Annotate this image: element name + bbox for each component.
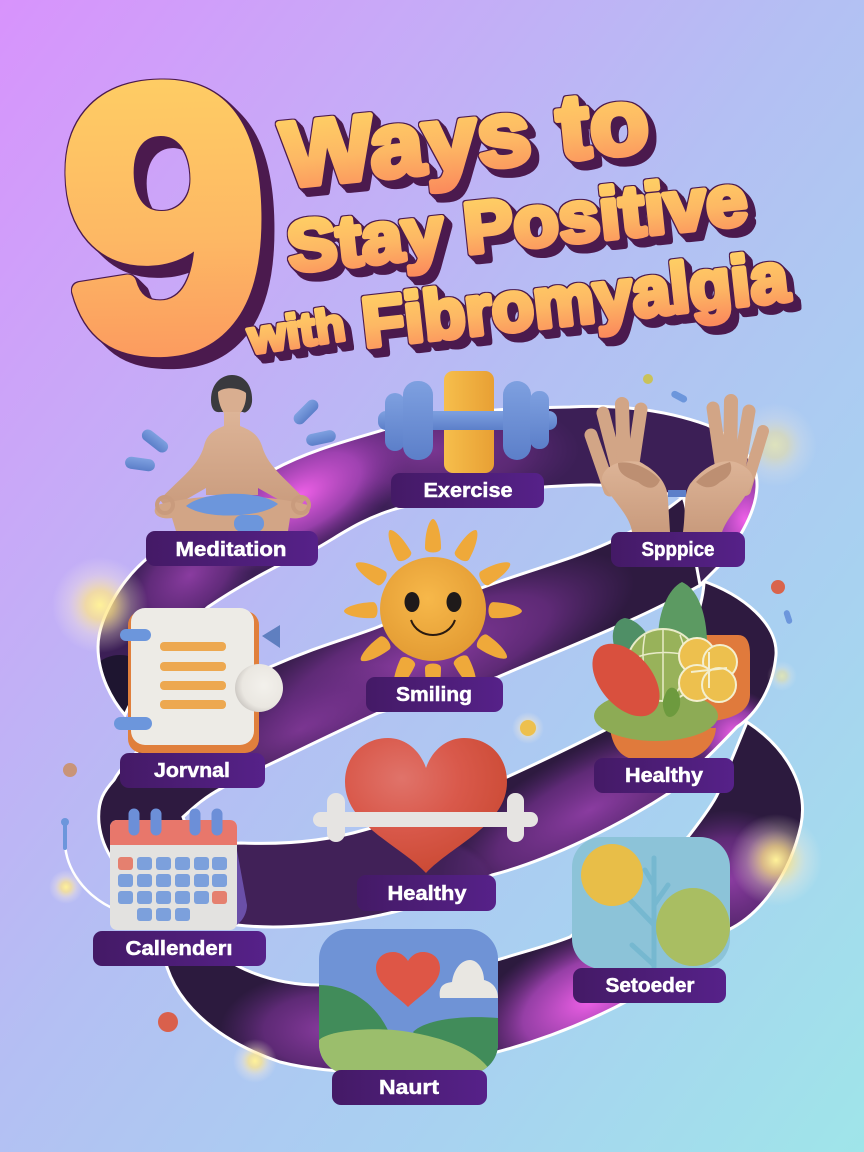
light glows: [49, 403, 822, 1083]
label: Callenderı: Callenderı: [126, 938, 232, 960]
spiral ribbon path: [65, 386, 810, 1118]
label: Naurt: Naurt: [379, 1077, 439, 1099]
label: Smiling: [366, 677, 503, 712]
label: Meditation: [146, 531, 318, 566]
icon: healthy food bowl: [579, 582, 750, 760]
label: Exercise: [391, 473, 544, 508]
label: Setoeder: [573, 968, 726, 1003]
label: Exercise: Exercise: [424, 480, 512, 502]
label: Callenderı: [93, 931, 266, 966]
label: Healthy (food): [594, 758, 734, 793]
title: Ways to: Ways to: [277, 69, 653, 207]
label: Healthy (heart): Healthy: [388, 883, 467, 905]
icon: meditating person: [124, 375, 337, 532]
title: Stay Positive: Stay Positive: [283, 160, 751, 288]
label: Setoeder: Setoeder: [606, 975, 695, 997]
icon: calendar: [110, 814, 247, 930]
title: big number 9: 9: [58, 10, 270, 425]
icon: dumbbell: [378, 371, 557, 473]
decorative beads and dashes: [61, 374, 793, 1032]
label: Spppice: [611, 532, 745, 567]
label: Spppice: Spppice: [642, 539, 714, 561]
label: Healthy (food): Healthy: [625, 765, 704, 787]
label: Naurt: [332, 1070, 487, 1105]
label: Meditation: Meditation: [176, 539, 286, 561]
ribbon: top band: [96, 404, 758, 717]
icon: smiling sun: [344, 519, 522, 697]
label: Smiling: Smiling: [396, 684, 472, 706]
ribbon: middle zig-zag band: [99, 497, 780, 943]
label: Jorvnal: [120, 753, 265, 788]
label: Jorvnal: Jorvnal: [154, 760, 230, 782]
title: Fibromyalgia: Fibromyalgia: [358, 237, 793, 362]
ribbon: bottom band: [165, 720, 804, 1072]
label: Healthy (heart): [357, 875, 496, 911]
icon: nature landscape card: [319, 929, 498, 1074]
title: with: with: [244, 297, 348, 364]
icon: two raised hands: [591, 401, 763, 532]
icon: heart with dumbbell: [313, 738, 538, 873]
icon: seed and tree card: [572, 837, 730, 969]
ribbon: loose white line: [65, 843, 112, 908]
title: [58, 10, 793, 425]
icon: journal notebook: [114, 608, 283, 753]
